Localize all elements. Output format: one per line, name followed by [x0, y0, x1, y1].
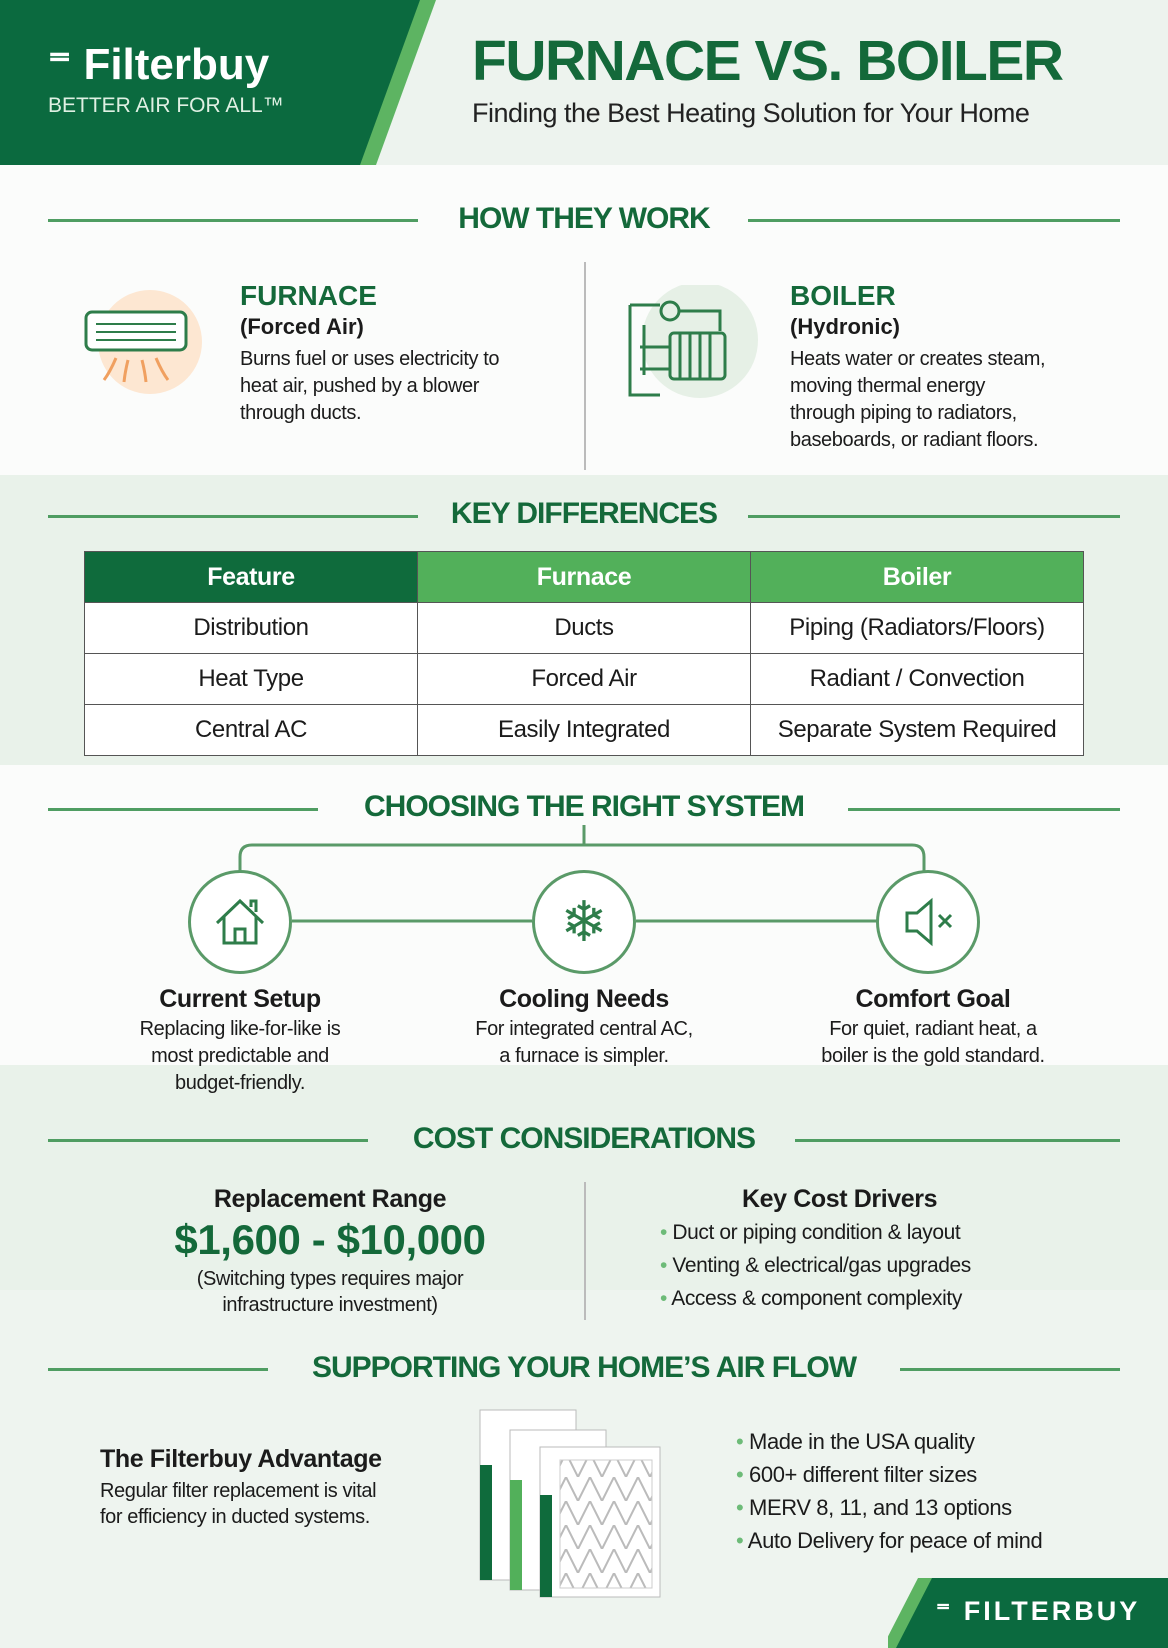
text: SUPPORTING YOUR HOME’S AIR FLOW — [312, 1351, 856, 1384]
text: comfort goal: For quiet, radiant heat, a — [829, 1018, 1037, 1040]
text: cooling needs: For integrated central AC, — [475, 1018, 693, 1040]
text: COST CONSIDERATIONS — [413, 1122, 755, 1155]
text: KEY DIFFERENCES — [451, 497, 717, 530]
table: comparison: Distribution — [193, 614, 309, 641]
icon: mute speaker — [876, 870, 980, 974]
panel: boiler: moving thermal energy — [790, 375, 985, 397]
list: filterbuy benefits: • 600+ different filter sizes — [736, 1462, 977, 1487]
heading: how they work — [48, 219, 418, 222]
text: filterbuy advantage: The Filterbuy Advantage — [100, 1445, 382, 1473]
icon: snowflake — [532, 870, 636, 974]
panel: furnace — [84, 280, 499, 424]
panel: boiler: through piping to radiators, — [790, 402, 1017, 424]
title — [472, 29, 1063, 128]
panel: furnace: (Forced Air) — [240, 314, 364, 339]
panel: furnace: FURNACE — [240, 280, 377, 311]
heading: choosing — [48, 808, 318, 811]
text: filterbuy advantage: for efficiency in ducted systems. — [100, 1506, 370, 1528]
table: comparison: Boiler — [883, 562, 951, 590]
header — [0, 0, 1168, 165]
panel: boiler: (Hydronic) — [790, 314, 900, 339]
panel: replacement range: $1,600 - $10,000 — [174, 1216, 486, 1263]
panel: cost drivers — [660, 1185, 971, 1310]
connector lines — [238, 825, 926, 922]
panel: boiler: baseboards, or radiant floors. — [790, 429, 1038, 451]
table: comparison: Furnace — [537, 562, 631, 590]
panel: boiler — [628, 280, 1045, 451]
text: current setup: most predictable and — [151, 1045, 329, 1067]
panel: furnace: through ducts. — [240, 402, 361, 424]
panel: cost drivers: Key Cost Drivers — [742, 1185, 937, 1213]
panel: boiler: Heats water or creates steam, — [790, 348, 1045, 370]
text: comfort goal: Comfort Goal — [856, 985, 1010, 1013]
text: filterbuy advantage — [100, 1445, 382, 1528]
table: comparison: Easily Integrated — [498, 716, 670, 743]
panel: furnace: heat air, pushed by a blower — [240, 375, 479, 397]
list: filterbuy benefits — [736, 1429, 1042, 1553]
heading: supporting — [48, 1368, 268, 1371]
table: comparison: Feature — [207, 562, 295, 590]
text: cooling needs: Cooling Needs — [499, 985, 669, 1013]
table: comparison: Heat Type — [198, 665, 304, 692]
icon: snowflake: ❄ — [561, 890, 607, 953]
text: comfort goal: boiler is the gold standard. — [821, 1045, 1045, 1067]
table: comparison — [84, 551, 1084, 756]
text: CHOOSING THE RIGHT SYSTEM — [364, 790, 804, 823]
panel: cost drivers: • Venting & electrical/gas upgrades — [660, 1254, 971, 1277]
icon: furnace — [84, 290, 202, 394]
title: Finding the Best Heating Solution for Your Home — [472, 98, 1029, 128]
logo — [48, 40, 284, 117]
panel: furnace: Burns fuel or uses electricity to — [240, 348, 499, 370]
table: comparison: Forced Air — [531, 665, 637, 692]
icon: house — [188, 870, 292, 974]
heading: key differences — [48, 515, 418, 518]
text: HOW THEY WORK — [458, 202, 710, 235]
panel: replacement range: (Switching types requires major — [197, 1268, 463, 1290]
panel: boiler: BOILER — [790, 280, 896, 311]
table: comparison: Piping (Radiators/Floors) — [789, 614, 1045, 641]
table: comparison: Ducts — [554, 614, 614, 641]
text: cooling needs: a furnace is simpler. — [499, 1045, 669, 1067]
panel: replacement range — [174, 1185, 486, 1316]
text: filterbuy advantage: Regular filter replacement is vital — [100, 1480, 376, 1502]
panel: cost drivers: • Duct or piping condition & layout — [660, 1221, 960, 1244]
list: filterbuy benefits: • Made in the USA quality — [736, 1429, 975, 1454]
image: filters — [480, 1410, 660, 1598]
table: comparison: Central AC — [195, 716, 307, 743]
section backgrounds — [0, 165, 1168, 475]
table: comparison: Separate System Required — [778, 716, 1056, 743]
text: comfort goal — [821, 985, 1045, 1067]
table: comparison: Radiant / Convection — [810, 665, 1024, 692]
title: FURNACE VS. BOILER — [472, 29, 1063, 93]
logo: ⁼ Filterbuy — [48, 40, 269, 89]
footer logo: ⁼ FILTERBUY — [936, 1596, 1140, 1626]
panel: cost drivers: • Access & component complexity — [660, 1287, 962, 1310]
text: cooling needs — [475, 985, 693, 1067]
footer logo — [888, 1578, 1168, 1648]
icon: boiler — [628, 285, 758, 398]
panel: replacement range: infrastructure investment) — [222, 1294, 438, 1316]
panel: replacement range: Replacement Range — [214, 1185, 446, 1213]
text: current setup — [140, 985, 340, 1094]
list: filterbuy benefits: • Auto Delivery for peace of mind — [736, 1528, 1042, 1553]
text: current setup: Current Setup — [159, 985, 321, 1013]
text: current setup: budget-friendly. — [175, 1072, 305, 1094]
text: current setup: Replacing like-for-like is — [140, 1018, 340, 1040]
logo: BETTER AIR FOR ALL™ — [48, 94, 284, 117]
heading: cost — [48, 1139, 368, 1142]
list: filterbuy benefits: • MERV 8, 11, and 13 options — [736, 1495, 1012, 1520]
